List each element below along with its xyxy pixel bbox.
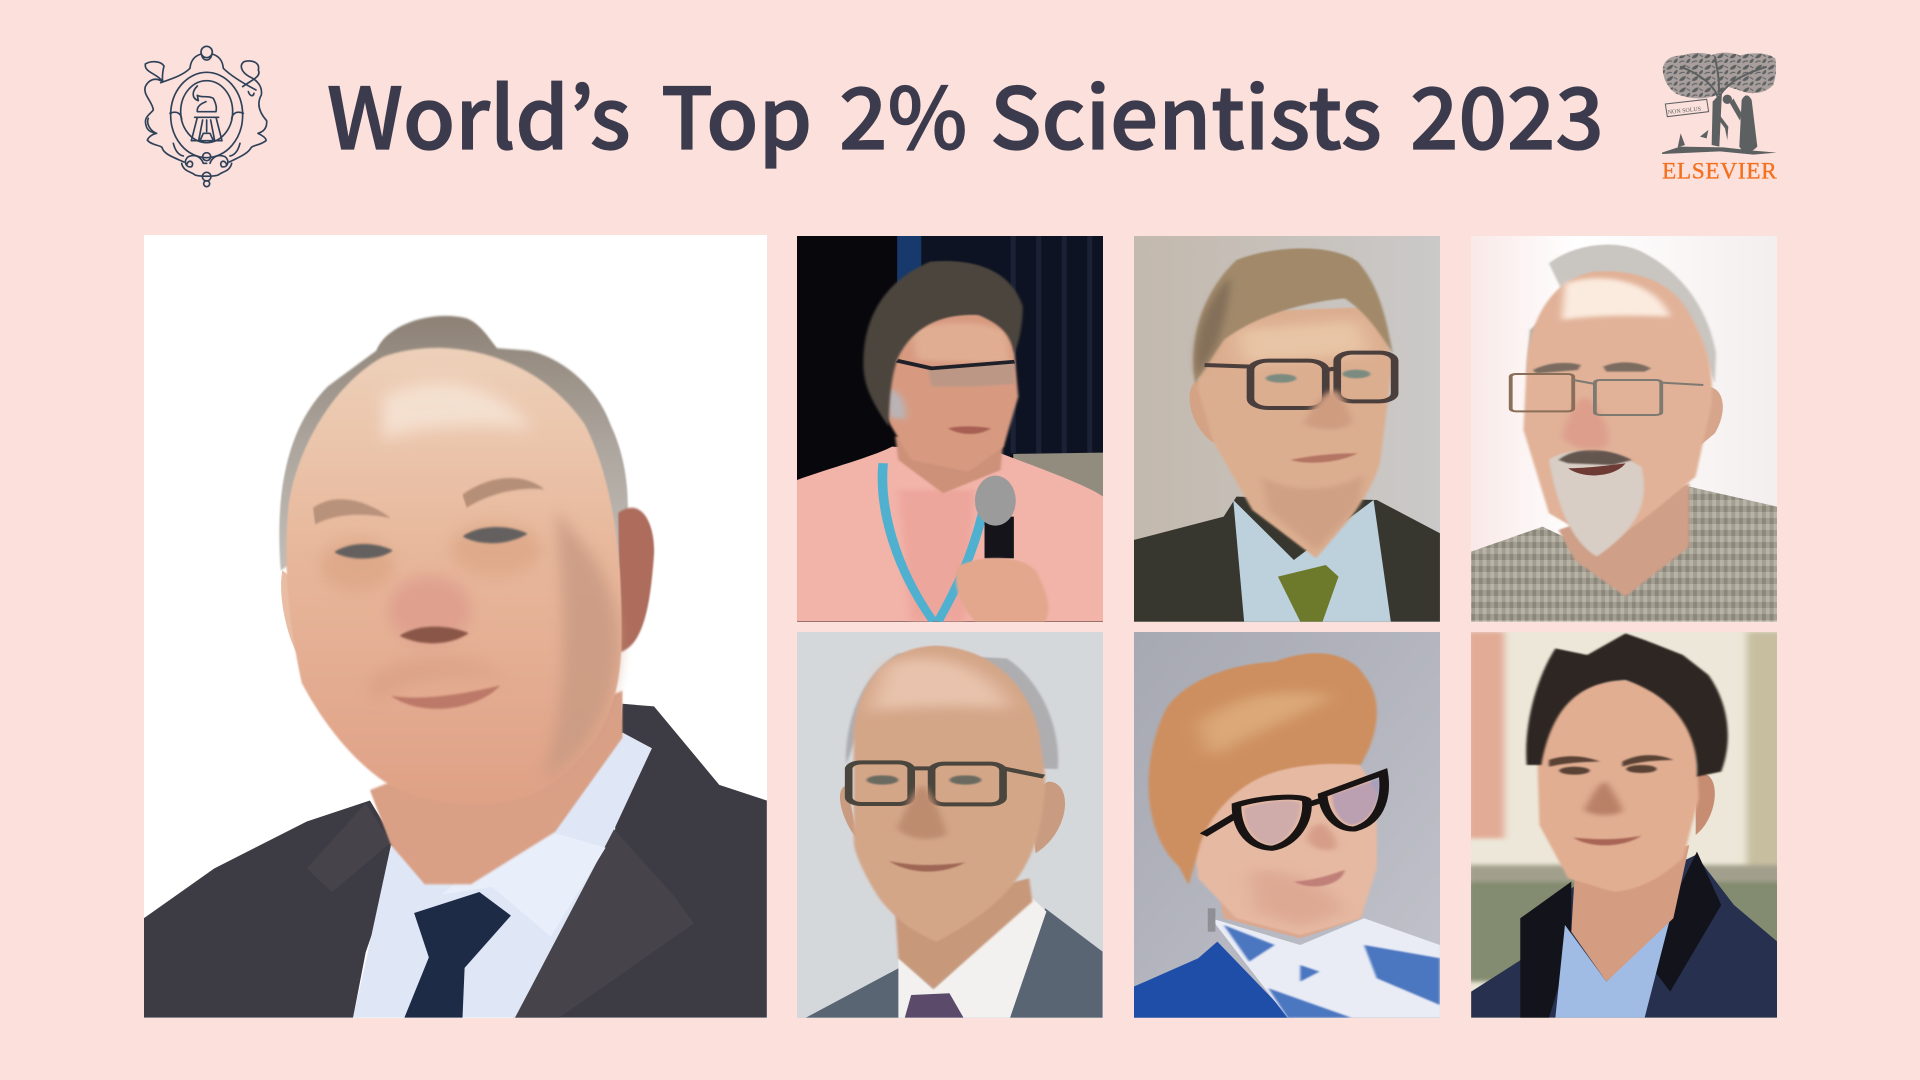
- lanyard: [882, 463, 983, 622]
- title: 2023: [1410, 51, 1604, 174]
- background scene: [1466, 632, 1785, 982]
- ears: [840, 782, 1065, 853]
- facial shading: [319, 382, 619, 780]
- eyes: [867, 775, 981, 785]
- face: [1536, 680, 1699, 892]
- banner: Non Solus: NON SOLUS: [1668, 107, 1701, 116]
- title: World’s: [327, 51, 631, 174]
- logo: academy emblem: [145, 46, 267, 187]
- face: [886, 307, 1018, 472]
- mouth: [948, 426, 991, 434]
- photo: woman with red hair: [1134, 632, 1440, 1018]
- shirt: [1471, 487, 1777, 622]
- suit: [806, 908, 1103, 1018]
- ears: [618, 508, 654, 652]
- hair: [279, 316, 628, 570]
- ear: [1701, 387, 1723, 444]
- nose: [1307, 824, 1337, 850]
- wordmark: ELSEVIER: [1662, 159, 1777, 185]
- brows and eyes: [1549, 755, 1673, 775]
- hair: [846, 653, 1058, 769]
- brows and eyes: [313, 478, 545, 559]
- title: Scientists: [990, 51, 1382, 174]
- coat: [1471, 855, 1777, 1018]
- hair: [1149, 653, 1377, 885]
- photo: man with microphone: [797, 236, 1104, 622]
- mouth: [391, 685, 500, 709]
- face: [854, 646, 1045, 942]
- ears: [1696, 774, 1715, 835]
- logo: Elsevier: [1662, 53, 1777, 185]
- title: Top: [661, 51, 812, 174]
- photo: bearded man: [1471, 236, 1777, 622]
- neck: [1217, 885, 1364, 938]
- neck: [895, 437, 1004, 493]
- neck: [1571, 845, 1689, 982]
- brows: [1533, 362, 1651, 373]
- nose: [897, 785, 946, 839]
- face: [286, 348, 622, 804]
- photo: man with tortoiseshell glasses: [1134, 236, 1440, 622]
- mouth: [1573, 836, 1641, 845]
- mouth: [889, 861, 965, 872]
- glasses: [1511, 374, 1703, 415]
- mouth: [1568, 463, 1626, 475]
- ear: [1190, 380, 1214, 443]
- scarf: [1211, 918, 1440, 1018]
- neck: [895, 878, 1032, 989]
- tie: [404, 892, 511, 1018]
- neck: [1559, 483, 1689, 597]
- shirt: [1555, 918, 1670, 1018]
- nose: [1303, 390, 1353, 429]
- hair: [863, 261, 1023, 427]
- nose: [1562, 397, 1608, 449]
- microphone: [975, 476, 1016, 558]
- face: [1189, 752, 1377, 935]
- jacket: [1134, 942, 1291, 1018]
- photo: large portrait: [144, 235, 767, 1018]
- nose: [1584, 782, 1622, 815]
- hand: [956, 558, 1048, 622]
- glasses: [849, 762, 1044, 804]
- tie: [1278, 565, 1339, 622]
- photo: man with grey hair and dark glasses: [797, 632, 1103, 1018]
- neck: [370, 691, 622, 884]
- glasses: [1205, 353, 1395, 408]
- beard: [1549, 451, 1644, 557]
- hair: [1549, 245, 1716, 383]
- curtain: [897, 236, 1104, 456]
- glasses: [1203, 773, 1384, 848]
- hair: [1193, 248, 1393, 383]
- mouth: [1294, 870, 1345, 886]
- nose: [388, 576, 472, 644]
- suit: [1134, 497, 1440, 622]
- icon: Elsevier tree: [1662, 53, 1777, 155]
- face: [1523, 271, 1712, 547]
- shirt: [797, 447, 1103, 622]
- photo: young man with dark hair: [1466, 632, 1785, 1018]
- shirt: [353, 733, 652, 1018]
- shirt: [1233, 500, 1391, 622]
- eyes: [1266, 370, 1370, 383]
- earring: [1208, 908, 1215, 932]
- shirt: [898, 898, 1046, 1018]
- title: 2%: [839, 51, 967, 174]
- glasses: [897, 361, 1015, 387]
- sofa: [1013, 453, 1103, 500]
- suit: [144, 704, 767, 1018]
- face: [1198, 307, 1393, 558]
- tie: [905, 993, 963, 1018]
- lenses: [1244, 778, 1380, 845]
- mouth: [1291, 453, 1358, 463]
- hair: [1526, 633, 1728, 777]
